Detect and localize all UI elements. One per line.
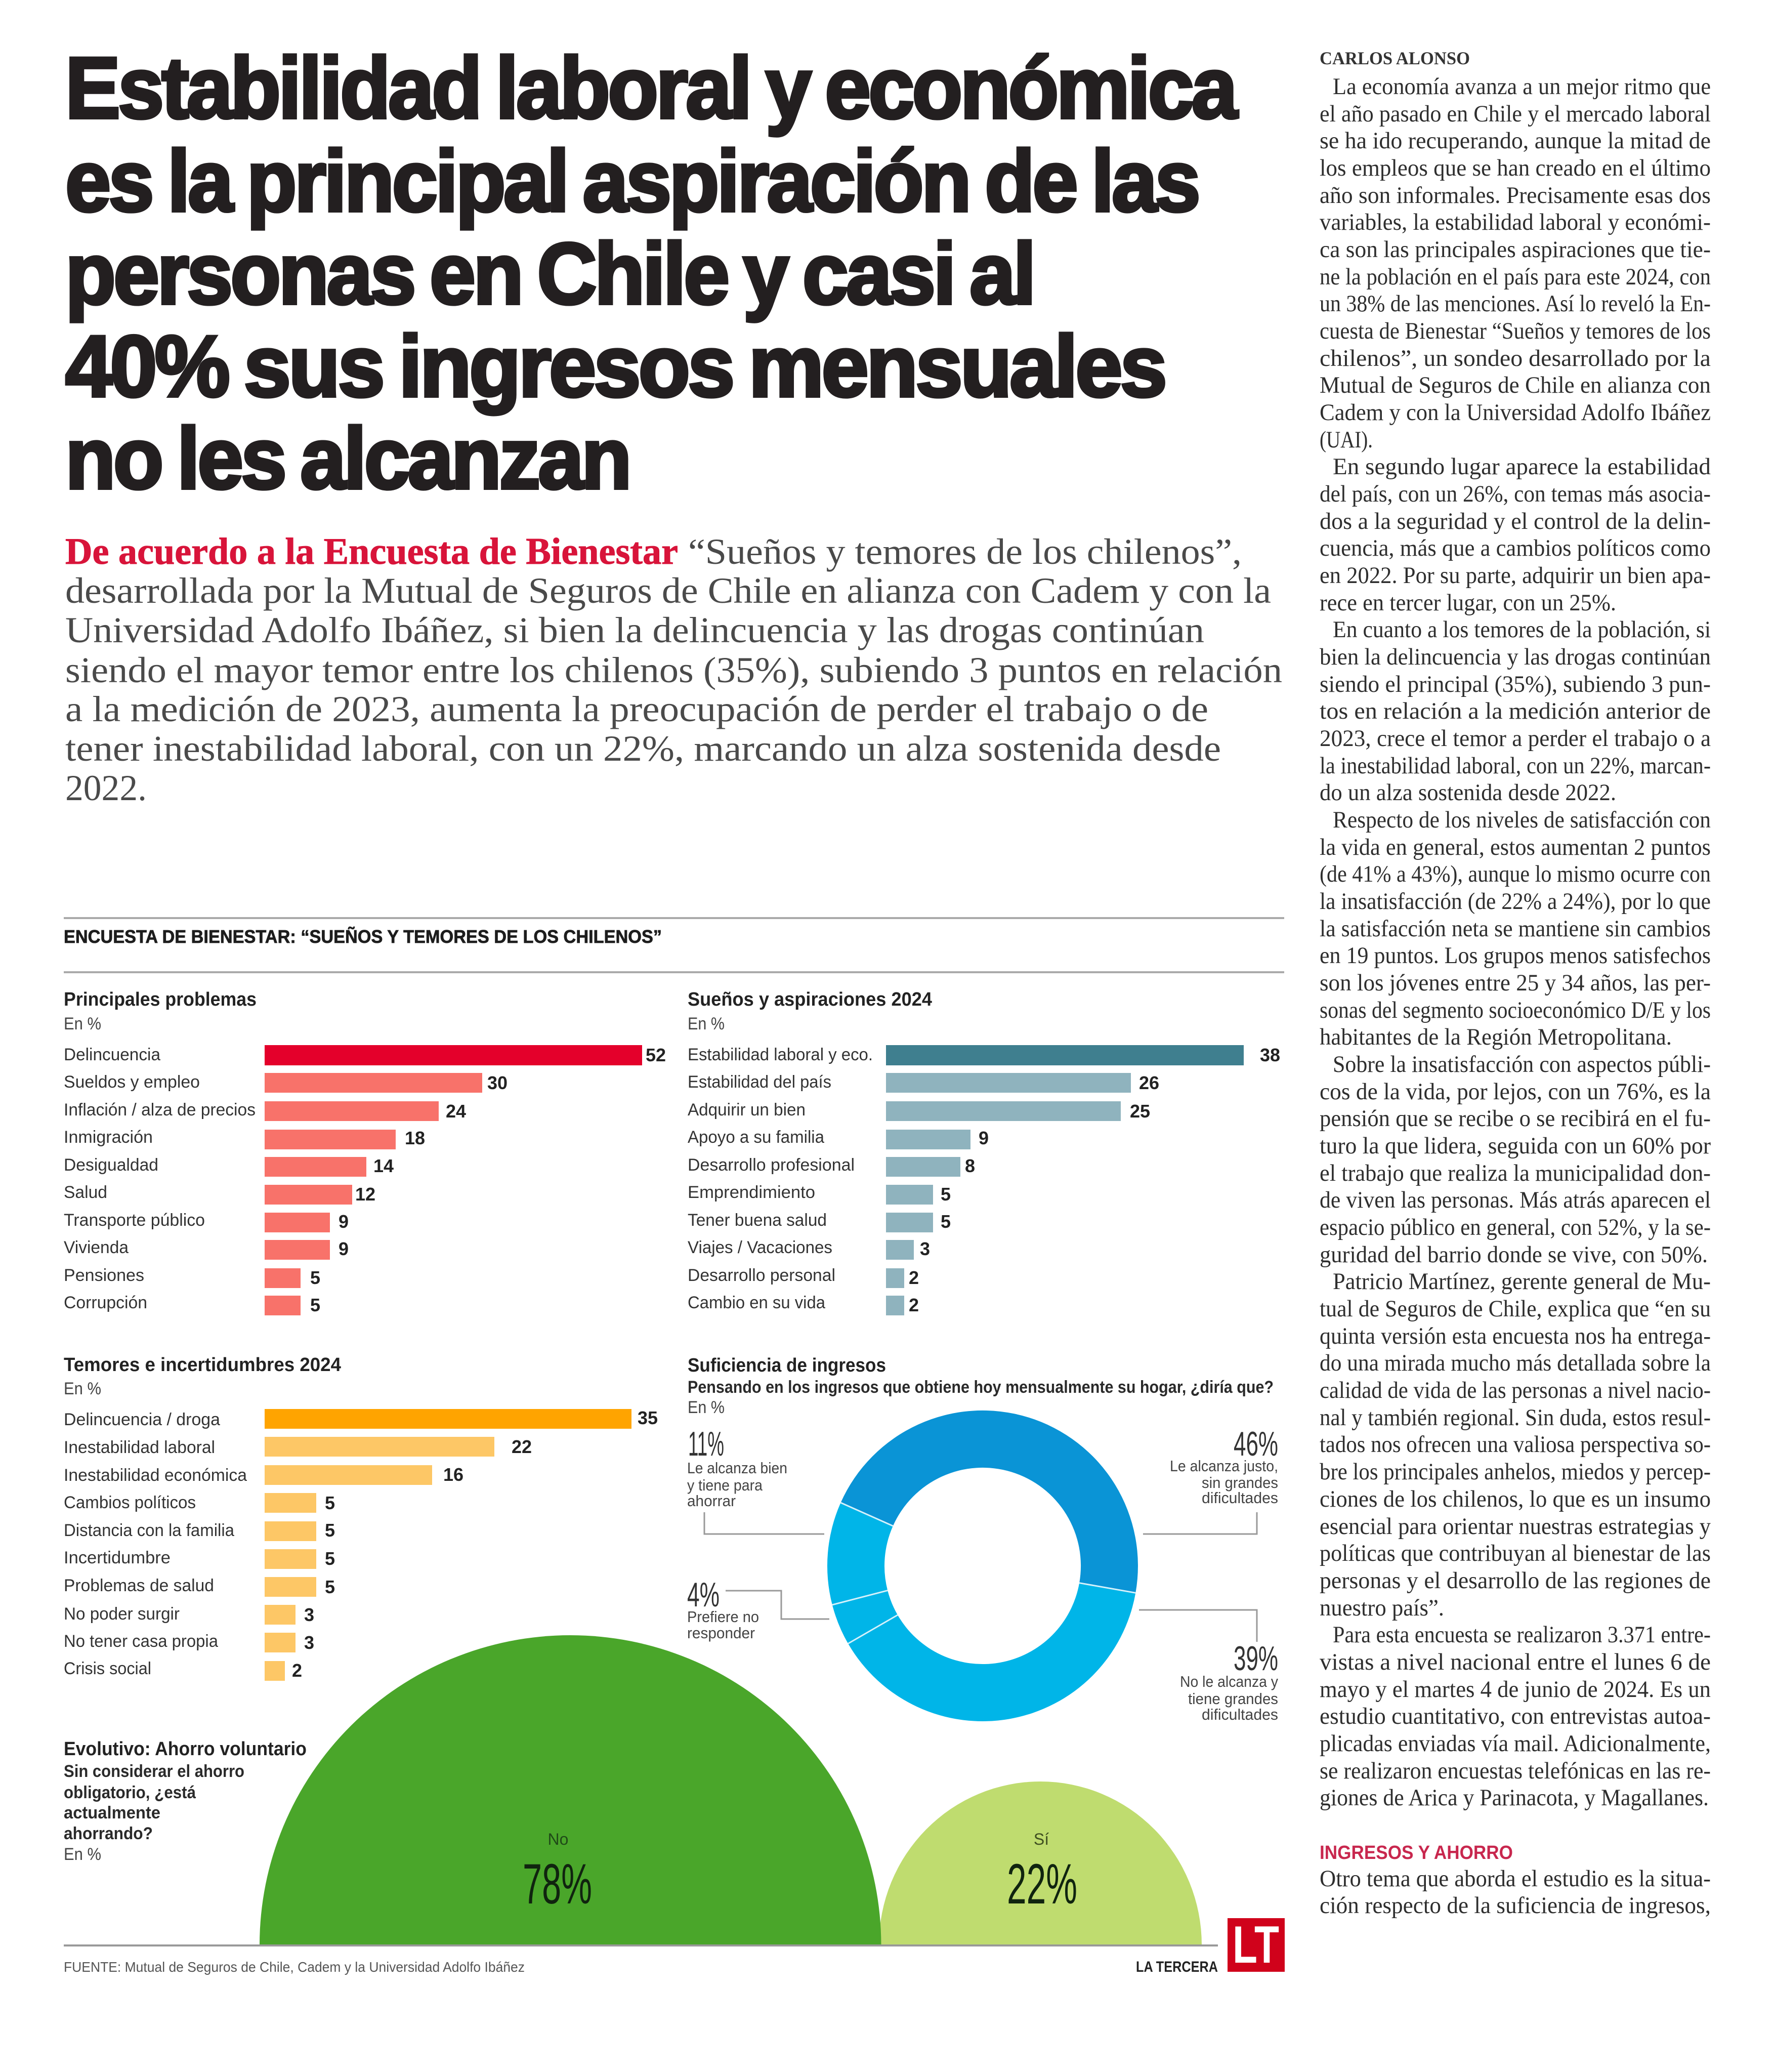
deck paragraph: Universidad Adolfo Ibáñez, si bien la delincuencia y las drogas continúan (65, 610, 1204, 650)
bar: Estabilidad laboral y eco. (688, 1045, 1280, 1065)
article body text: en 19 puntos. Los grupos menos satisfechos (1320, 942, 1711, 969)
bar: Crisis social: Crisis social (64, 1659, 151, 1678)
article body text: Patricio Martínez, gerente general de Mu- (1333, 1268, 1711, 1295)
bar: Crisis social (64, 1659, 302, 1681)
deck paragraph: tener inestabilidad laboral, con un 22%, marcando un alza sostenida desde (65, 728, 1221, 769)
bar: Transporte público (64, 1211, 349, 1232)
heading: principales problemas: Principales problemas (64, 989, 257, 1010)
bar: Desarrollo profesional: Desarrollo profesional (688, 1155, 855, 1175)
deck paragraph: 2022. (65, 768, 147, 808)
bar: Emprendimiento (688, 1183, 951, 1205)
callout: 4%: responder (687, 1624, 755, 1642)
article body text: la insatisfacción (de 22% a 24%), por lo que (1320, 888, 1711, 915)
semicircle: No 78% (260, 1635, 881, 1945)
bar: Corrupción: 5 (310, 1295, 320, 1315)
bar: Estabilidad laboral y eco.: Estabilidad laboral y eco. (688, 1045, 873, 1064)
bar: Inmigración (64, 1128, 425, 1149)
bar: Cambios políticos (64, 1493, 335, 1513)
bar: Vivienda (64, 1238, 349, 1260)
semicircle: Sí 22% (879, 1781, 1202, 1945)
article body text: Mutual de Seguros de Chile en alianza con (1320, 372, 1711, 398)
bar: Delincuencia (64, 1045, 666, 1065)
article body text: políticas que contribuyan al bienestar de las (1320, 1540, 1711, 1566)
callout: 39%: dificultades (1202, 1706, 1278, 1723)
semicircle: No 78%: 78% (523, 1852, 592, 1916)
article body text: estudio cuantitativo, con entrevistas autoa- (1320, 1703, 1711, 1729)
bar: Estabilidad del país: 26 (1139, 1072, 1159, 1093)
article body text: guridad del barrio donde se vive, con 50%. (1320, 1241, 1708, 1268)
article body text: la inestabilidad laboral, con un 22%, marcan- (1320, 753, 1711, 779)
panel: suficiencia de ingresos (687, 1355, 1278, 1723)
bar: Viajes / Vacaciones: Viajes / Vacaciones (688, 1238, 832, 1257)
article body text: sonas del segmento socioeconómico D/E y los (1320, 997, 1711, 1023)
article body text (1320, 73, 1711, 1811)
bar: Inestabilidad laboral: 22 (512, 1436, 532, 1457)
article body text: nal y también regional. Sin duda, estos resul- (1320, 1404, 1711, 1431)
callout: 11%: ahorrar (687, 1492, 736, 1510)
bar: Tener buena salud: Tener buena salud (688, 1211, 827, 1230)
article body text: Respecto de los niveles de satisfacción con (1333, 807, 1711, 833)
bar: No poder surgir (64, 1604, 314, 1625)
bar: Distancia con la familia: 5 (325, 1520, 335, 1541)
callout: 46% (1143, 1425, 1278, 1534)
article body text: chilenos”, un sondeo desarrollado por la (1320, 345, 1711, 371)
title: 40% sus ingresos mensuales (65, 318, 1165, 415)
heading: sueños y aspiraciones: Sueños y aspiraciones 2024 (688, 989, 932, 1010)
deck paragraph: De acuerdo a la Encuesta de Bienestar (65, 531, 678, 572)
article body text: do un alza sostenida desde 2022. (1320, 779, 1616, 806)
question: ahorrando? (64, 1824, 153, 1843)
bar: Distancia con la familia: Distancia con la familia (64, 1521, 234, 1540)
bar: Delincuencia / droga: Delincuencia / droga (64, 1410, 220, 1429)
bar: Inestabilidad económica: 16 (443, 1464, 463, 1485)
unit note: En % (64, 1379, 101, 1398)
article continuation (1320, 1866, 1711, 1919)
bar: No tener casa propia (64, 1632, 314, 1653)
bar: Emprendimiento: 5 (941, 1184, 951, 1205)
bar: Cambios políticos: Cambios políticos (64, 1493, 196, 1512)
bar: Inmigración: Inmigración (64, 1128, 153, 1147)
bar: Cambios políticos: 5 (325, 1493, 335, 1513)
article continuation: Otro tema que aborda el estudio es la situa- (1320, 1866, 1711, 1892)
bar: Delincuencia: Delincuencia (64, 1045, 160, 1064)
bar: Apoyo a su familia (688, 1128, 989, 1149)
article body text: bien la delincuencia y las drogas continúan (1320, 644, 1711, 670)
article body text: bre los principales anhelos, miedos y percep- (1320, 1459, 1711, 1485)
bar: Desigualdad: Desigualdad (64, 1155, 158, 1175)
callout: 11%: Le alcanza bien (687, 1459, 787, 1477)
brand: La Tercera (1136, 1916, 1285, 1975)
heading: temores e incertidumbres: Temores e incertidumbres 2024 (64, 1354, 341, 1376)
bar: Corrupción (64, 1293, 320, 1315)
semicircle: Sí 22%: 22% (1007, 1852, 1077, 1916)
article body text: giones de Arica y Parinacota, y Magallanes. (1320, 1785, 1709, 1811)
callout: 11%: 11% (688, 1425, 724, 1463)
article body text: ciones de los chilenos, lo que es un insumo (1320, 1486, 1711, 1512)
bar: Cambio en su vida: Cambio en su vida (688, 1293, 825, 1312)
article body text: tual de Seguros de Chile, explica que “en su (1320, 1296, 1711, 1322)
bar: No tener casa propia: 3 (304, 1632, 314, 1653)
article body text: do una mirada mucho más detallada sobre la (1320, 1350, 1711, 1376)
title: no les alcanzan (65, 410, 629, 507)
article body text: cos de la vida, por lejos, con un 76%, es la (1320, 1079, 1711, 1105)
bar: Pensiones: Pensiones (64, 1266, 144, 1285)
article body text: el trabajo que realiza la municipalidad don- (1320, 1160, 1711, 1186)
bar: Salud: Salud (64, 1183, 107, 1202)
bar: Desigualdad: 14 (373, 1155, 394, 1176)
brand: La Tercera: LA TERCERA (1136, 1959, 1218, 1975)
bar: Cambio en su vida: 2 (909, 1295, 919, 1315)
panel: sueños y aspiraciones (688, 989, 1280, 1315)
article continuation: ción respecto de la suficiencia de ingresos, (1320, 1892, 1711, 1919)
bar: Inmigración: 18 (405, 1128, 425, 1148)
article body text: cuesta de Bienestar “Sueños y temores de los (1320, 318, 1711, 344)
bar: Delincuencia: 52 (646, 1045, 666, 1065)
article body text: tos en relación a la medición anterior de (1320, 698, 1711, 724)
article body text: pensión que se recibe o se recibirá en el fu- (1320, 1105, 1711, 1132)
article body text: los empleos que se han creado en el último (1320, 155, 1711, 181)
survey header band (64, 917, 1284, 973)
bar: Estabilidad del país (688, 1072, 1159, 1093)
bar: Delincuencia / droga: 35 (638, 1407, 658, 1428)
article body text: quinta versión esta encuesta nos ha entrega- (1320, 1323, 1711, 1349)
bar: Salud (64, 1183, 375, 1205)
byline: CARLOS ALONSO (1320, 48, 1470, 68)
bar: Viajes / Vacaciones: 3 (920, 1238, 930, 1259)
article body text: ne la población en el país para este 2024, con (1320, 264, 1711, 290)
callout: 46%: Le alcanza justo, (1170, 1457, 1278, 1475)
bar: Adquirir un bien: 25 (1130, 1101, 1150, 1122)
callout: 39%: 39% (1234, 1639, 1278, 1678)
article body text: se ha ido recuperando, aunque la mitad de (1320, 128, 1711, 154)
callout: 46%: dificultades (1202, 1489, 1278, 1507)
article body text: son los jóvenes entre 25 y 34 años, las per- (1320, 970, 1711, 996)
bar: Desarrollo personal: Desarrollo personal (688, 1266, 835, 1285)
bar: Cambio en su vida (688, 1293, 919, 1315)
bar: Desarrollo profesional (688, 1155, 975, 1177)
article body text: 2023, crece el temor a perder el trabajo o a (1320, 725, 1711, 752)
article body text: En cuanto a los temores de la población, si (1333, 616, 1711, 643)
semicircle: No 78%: No (548, 1830, 568, 1848)
survey header band: ENCUESTA DE BIENESTAR: “SUEÑOS Y TEMORES DE LOS CHILENOS” (64, 926, 662, 947)
article body text: nuestro país”. (1320, 1595, 1444, 1621)
bar: Emprendimiento: Emprendimiento (688, 1183, 815, 1202)
article body text: personas y el desarrollo de las regiones de (1320, 1567, 1711, 1594)
bar: Crisis social: 2 (292, 1660, 302, 1681)
panel: ahorro voluntario (64, 1635, 1218, 1946)
bar: Inflación: 24 (446, 1101, 466, 1122)
deck paragraph: desarrollada por la Mutual de Seguros de Chile en alianza con Cadem y con la (65, 570, 1271, 611)
title (65, 39, 1238, 507)
article body text: (de 41% a 43%), aunque lo mismo ocurre con (1320, 861, 1711, 887)
article body text: el año pasado en Chile y el mercado laboral (1320, 101, 1711, 127)
bar: Apoyo a su familia: 9 (979, 1128, 989, 1148)
heading: suficiencia de ingresos: Suficiencia de ingresos (688, 1355, 886, 1376)
article body text: Sobre la insatisfacción con aspectos públi- (1333, 1051, 1711, 1078)
article body text: turo la que lidera, seguida con un 60% por (1320, 1133, 1711, 1159)
bar: Viajes / Vacaciones (688, 1238, 930, 1260)
article column (1320, 48, 1711, 1919)
title: es la principal aspiración de las (65, 133, 1198, 230)
article body text: dos a la seguridad y el control de la delin- (1320, 508, 1711, 534)
panel: principales problemas (64, 989, 666, 1315)
article body text: tados nos ofrecen una valiosa perspectiva so- (1320, 1431, 1711, 1458)
bar: Transporte público: Transporte público (64, 1211, 205, 1230)
bar: Incertidumbre (64, 1548, 335, 1569)
article body text: calidad de vida de las personas a nivel nacio- (1320, 1377, 1711, 1403)
callout: 46%: sin grandes (1202, 1474, 1278, 1491)
callout: 46%: 46% (1234, 1425, 1278, 1463)
article body text: Cadem y con la Universidad Adolfo Ibáñez (1320, 399, 1711, 426)
bar: No poder surgir: 3 (304, 1604, 314, 1625)
unit note: En % (688, 1398, 725, 1417)
bar: Desarrollo personal (688, 1266, 919, 1288)
bar: Tener buena salud: 5 (941, 1211, 951, 1232)
deck paragraph (65, 531, 1282, 808)
article body text: en 2022. Por su parte, adquirir un bien apa- (1320, 562, 1711, 589)
bar: Incertidumbre: Incertidumbre (64, 1548, 171, 1567)
brand: La Tercera: LT (1233, 1916, 1279, 1974)
bar: Pensiones (64, 1266, 320, 1288)
bar: Salud: 12 (355, 1184, 375, 1205)
article body text: Para esta encuesta se realizaron 3.371 entre- (1333, 1622, 1711, 1648)
bar: Inestabilidad laboral: Inestabilidad laboral (64, 1438, 215, 1457)
article body text: En segundo lugar aparece la estabilidad (1333, 453, 1711, 480)
bar: Apoyo a su familia: Apoyo a su familia (688, 1128, 824, 1147)
question: Sin considerar el ahorro (64, 1762, 244, 1781)
bar: Incertidumbre: 5 (325, 1548, 335, 1569)
bar: Problemas de salud: 5 (325, 1577, 335, 1597)
article body text: del país, con un 26%, con temas más asocia- (1320, 481, 1711, 507)
bar: Desarrollo profesional: 8 (965, 1155, 975, 1176)
article body text: de viven las personas. Más atrás aparecen el (1320, 1187, 1711, 1213)
article body text: variables, la estabilidad laboral y económi- (1320, 209, 1711, 235)
bar: Vivienda: Vivienda (64, 1238, 129, 1257)
article body text: siendo el principal (35%), subiendo 3 pun- (1320, 671, 1711, 697)
article body text: se realizaron encuestas telefónicas en las re- (1320, 1758, 1711, 1784)
bar: Tener buena salud (688, 1211, 951, 1232)
bar: Transporte público: 9 (339, 1211, 349, 1232)
subheading: ingresos y ahorro: INGRESOS Y AHORRO (1320, 1842, 1513, 1863)
bar: Problemas de salud: Problemas de salud (64, 1576, 214, 1595)
unit note: En % (688, 1014, 725, 1033)
article body text: cuencia, más que a cambios políticos como (1320, 535, 1711, 561)
bar: Inflación: Inflación / alza de precios (64, 1100, 256, 1120)
bar: Sueldos y empleo: 30 (487, 1072, 508, 1093)
panel: temores e incertidumbres (64, 1354, 658, 1681)
callout: 39%: No le alcanza y (1180, 1673, 1278, 1690)
question: actualmente (64, 1803, 160, 1822)
bar: Corrupción: Corrupción (64, 1293, 147, 1312)
article body text: mayo y el martes 4 de junio de 2024. Es un (1320, 1676, 1711, 1703)
callout: 4% (687, 1576, 829, 1642)
deck paragraph: siendo el mayor temor entre los chilenos (35%), subiendo 3 puntos en relación (65, 650, 1282, 690)
article body text: un 38% de las menciones. Así lo reveló la En- (1320, 291, 1711, 317)
bar: Sueldos y empleo: Sueldos y empleo (64, 1072, 200, 1092)
article body text: la vida en general, estos aumentan 2 puntos (1320, 834, 1711, 860)
article body text: La economía avanza a un mejor ritmo que (1333, 73, 1711, 100)
source note: FUENTE: Mutual de Seguros de Chile, Cadem y la Universidad Adolfo Ibáñez (64, 1959, 525, 1975)
article body text: esencial para orientar nuestras estrategias y (1320, 1513, 1711, 1540)
question: obligatorio, ¿está (64, 1783, 196, 1802)
article body text: año son informales. Precisamente esas dos (1320, 182, 1711, 209)
article body text: (UAI). (1320, 427, 1373, 453)
bar: Desarrollo personal: 2 (909, 1267, 919, 1288)
article body text: habitantes de la Región Metropolitana. (1320, 1024, 1672, 1050)
unit note: En % (64, 1014, 101, 1033)
bar: Inestabilidad económica (64, 1464, 463, 1485)
article body text: ca son las principales aspiraciones que tie- (1320, 236, 1711, 263)
article body text: rece en tercer lugar, con un 25%. (1320, 590, 1616, 616)
bar: Inestabilidad laboral (64, 1436, 532, 1457)
article body text: espacio público en general, con 52%, y la se- (1320, 1214, 1711, 1240)
bar: Delincuencia / droga (64, 1407, 658, 1429)
callout: 4%: Prefiere no (687, 1608, 759, 1626)
title: Estabilidad laboral y económica (65, 39, 1238, 137)
callout: 11%: y tiene para (687, 1476, 763, 1494)
article body text: plicadas enviadas vía mail. Adicionalmente, (1320, 1730, 1711, 1757)
title: personas en Chile y casi al (65, 225, 1034, 322)
callout: 4%: 4% (687, 1576, 720, 1614)
bar: Estabilidad laboral y eco.: 38 (1260, 1045, 1280, 1065)
callout: 39%: tiene grandes (1188, 1690, 1278, 1708)
deck paragraph: “Sueños y temores de los chilenos”, (688, 531, 1242, 572)
bar: No poder surgir: No poder surgir (64, 1604, 180, 1624)
bar: Distancia con la familia (64, 1520, 335, 1541)
unit note: En % (64, 1845, 101, 1864)
bar: Adquirir un bien: Adquirir un bien (688, 1100, 806, 1120)
bar: Inestabilidad económica: Inestabilidad económica (64, 1466, 247, 1485)
bar: Estabilidad del país: Estabilidad del país (688, 1072, 831, 1092)
article body text: vistas a nivel nacional entre el lunes 6 de (1320, 1649, 1711, 1675)
heading: ahorro voluntario: Evolutivo: Ahorro voluntario (64, 1738, 307, 1760)
bar: Problemas de salud (64, 1576, 335, 1597)
bar: No tener casa propia: No tener casa propia (64, 1632, 218, 1651)
article body text: la satisfacción neta se mantiene sin cambios (1320, 916, 1711, 942)
callout: 11% (687, 1425, 824, 1534)
question (64, 1762, 244, 1843)
semicircle: Sí 22%: Sí (1034, 1830, 1049, 1848)
bar: Pensiones: 5 (310, 1267, 320, 1288)
donut chart (827, 1411, 1138, 1721)
deck paragraph: a la medición de 2023, aumenta la preocupación de perder el trabajo o de (65, 689, 1208, 729)
baseline axis (64, 1944, 1218, 1946)
callout: 39% (1139, 1610, 1278, 1723)
bar: Vivienda: 9 (339, 1238, 349, 1259)
bar: Adquirir un bien (688, 1100, 1150, 1122)
bar: Inflación (64, 1100, 466, 1122)
question: Pensando en los ingresos que obtiene hoy mensualmente su hogar, ¿diría que? (688, 1378, 1274, 1397)
bar: Sueldos y empleo (64, 1072, 508, 1093)
bar: Desigualdad (64, 1155, 394, 1177)
